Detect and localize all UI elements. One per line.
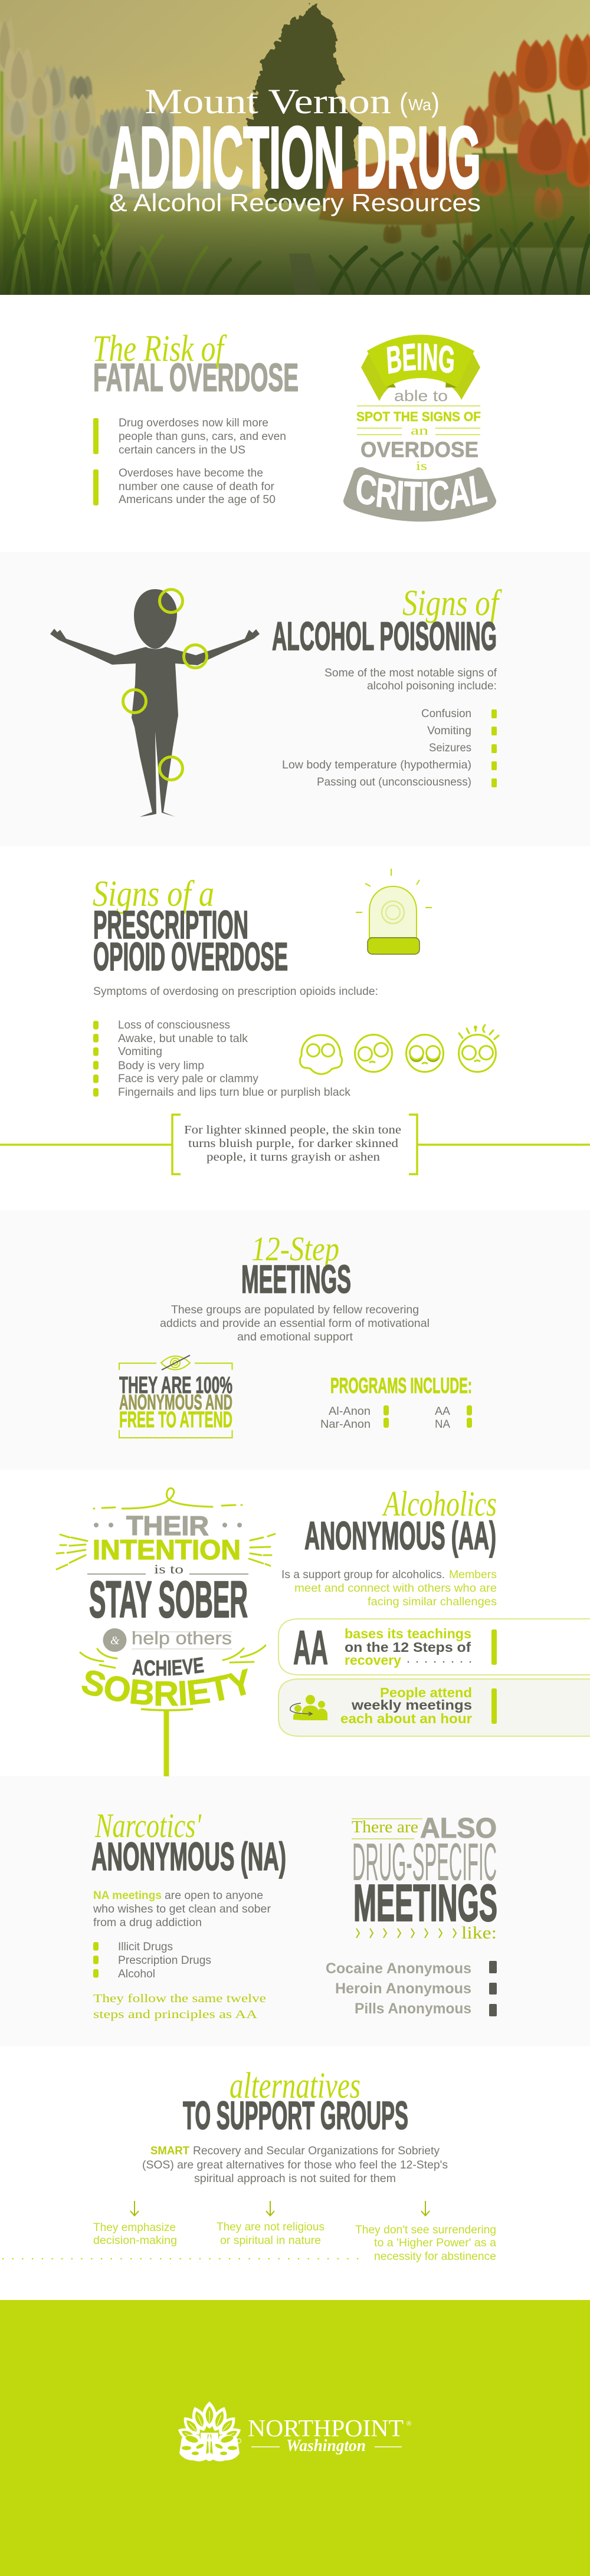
badge: being able to spot the signs [343,335,497,521]
card: AA teachings: AA [293,1621,328,1675]
text: achieve [132,1657,204,1676]
face: sweating [459,1025,499,1072]
intro text [160,1303,430,1343]
fact: drug overdoses: certain cancers in the US [119,443,245,456]
typographic block: drug-specific meetings [352,1813,497,1943]
note: same twelve steps [93,1992,266,2021]
description text: are open to anyone [165,1889,263,1902]
symptom list: Vomiting [118,1045,162,1058]
panel: 12-step meetings [0,1210,590,1470]
point: not religious: or spiritual in nature [220,2234,321,2247]
title line: Mount Vernon (Wa): ) [431,87,440,118]
drug-specific list [326,1960,497,2017]
programs list: Al-Anon [329,1405,371,1418]
fact: leading cause of death: number one cause of death for [119,480,275,493]
symptom list: Awake, but unable to talk [118,1032,248,1045]
description text: who wishes to get clean and sober [93,1903,271,1915]
sign: their intention is to stay sober [55,1487,276,1776]
description text: spiritual approach is not suited for them [194,2172,396,2185]
wings [80,1645,266,1668]
description text: (SOS) are great alternatives for those who feel the 12-Step's [142,2158,448,2171]
rays [57,1534,275,1569]
list of signs: Low body temperature (hypothermia) [282,758,471,771]
point: not religious: They are not religious [217,2220,324,2233]
description text: meet and connect with others who are [294,1582,497,1595]
ampersand badge: & [110,1634,120,1647]
card: AA teachings [278,1619,590,1675]
chevrons [356,1928,456,1938]
callout: anonymous and free: ANONYMOUS AND [119,1390,232,1414]
symptom list: Loss of consciousness [118,1018,230,1031]
sign: their intention is to stay sober: STAY SOBER [89,1571,248,1628]
card: weekly meetings: People attend [380,1685,472,1700]
callout: skin tone note: For lighter skinned people, the skin tone [184,1123,401,1136]
list of signs: Vomiting [427,724,471,737]
ampersand badge [103,1628,126,1652]
face: unfocused eyes [355,1034,392,1072]
point: higher power: to a 'Higher Power' as a [374,2236,496,2249]
text: spot the signs of: SPOT THE SIGNS OF [356,409,481,424]
point: higher power [355,2201,496,2263]
icon: siren [356,869,432,954]
white tulips, left [0,17,14,72]
card: weekly meetings: weekly meetings [351,1697,472,1713]
description text: facing similar challenges [368,1595,497,1608]
text: is to: is to [154,1562,183,1576]
icon: group of people [290,1695,327,1720]
flourish [94,1488,242,1509]
fact: drug overdoses [93,416,286,456]
programs list [320,1405,472,1431]
fact: drug overdoses: Drug overdoses now kill more [119,416,268,429]
sign post [141,1709,193,1776]
intro text [324,666,497,692]
background grey tulips [100,115,174,201]
panel: narcotics anonymous [0,1776,590,2046]
callout: anonymous and free: FREE TO ATTEND [119,1408,232,1432]
intro text: Symptoms of overdosing on prescription opioids include: [93,985,378,998]
callout: anonymous and free [119,1355,232,1438]
list of signs: Passing out (unconsciousness) [317,776,471,788]
text: sobriety: SOBRIETY [81,1668,248,1706]
typographic block: drug-specific meetings: ALSO [420,1813,497,1844]
heading script: Signs of a: Signs of a [93,874,214,914]
hero title [109,82,481,216]
callout: anonymous and free: THEY ARE 100% [119,1372,232,1398]
text: overdose: OVERDOSE [360,438,478,462]
description text [281,1568,497,1608]
note: same twelve steps: steps and principles as AA [93,2008,258,2021]
point: higher power: They don't see surrendering [355,2223,496,2236]
text: able to: able to [394,387,448,405]
description text: SMART [150,2144,189,2157]
text: an: an [411,423,428,438]
stems left [2,71,106,295]
hero photo: tulip field at sunset [0,0,590,295]
intro text: and emotional support [237,1330,353,1343]
text: sobriety [81,1668,248,1706]
symptom list: Fingernails and lips turn blue or purplish black [118,1086,350,1099]
ribbon: being: BEING [387,343,454,374]
icons: overdose faces [300,1025,499,1074]
drug-specific list: Heroin Anonymous [335,1980,471,1997]
face: pale [300,1035,342,1074]
card: weekly meetings: each about an hour [340,1711,472,1726]
description text: NA meetings [93,1889,162,1902]
ribbon: critical: CRITICAL [356,475,487,511]
title line: Mount Vernon (Wa): Mount Vernon [145,82,391,121]
heading: Programs Include: PROGRAMS INCLUDE: [330,1374,472,1398]
symptom list [93,1018,350,1099]
intro text: addicts and provide an essential form of motivational [160,1317,430,1330]
orange tulips, right [516,40,556,93]
fact: leading cause of death: Overdoses have become the [119,466,263,479]
fact: leading cause of death: Americans under the age of 50 [119,493,276,506]
description text [93,1889,271,1929]
ribbon: being [361,335,480,401]
logo: Northpoint Washington [176,2401,411,2462]
programs list: AA [435,1405,450,1418]
list of signs: Confusion [421,707,471,720]
drug list: Prescription Drugs [118,1954,211,1967]
description text: Recovery and Secular Organizations for Sobriety [193,2144,440,2157]
marker circle: shoulder [184,645,206,668]
callout: skin tone note: turns bluish purple, for darker skinned [188,1137,398,1150]
symptom list: Body is very limp [118,1059,204,1072]
drug list: Illicit Drugs [118,1940,173,1953]
intro text: alcohol poisoning include: [367,679,497,692]
title line: Mount Vernon (Wa): Wa [408,96,431,114]
dots [94,1523,242,1527]
drug-specific list: Cocaine Anonymous [326,1960,471,1977]
tree silhouette [245,2,365,203]
heading script: alternatives: alternatives [230,2066,360,2106]
list of signs: Seizures [429,741,471,754]
marker circle: head [159,590,183,612]
text: is: is [416,458,427,473]
heading: Prescription Opioid Overdose: OPIOID OVERDOSE [93,935,288,979]
human figure illustration [50,589,260,817]
heading: Anonymous (NA): ANONYMOUS (NA) [91,1835,286,1879]
text: their: THEIR [126,1510,209,1541]
card: AA teachings: on the 12 Steps of [345,1639,471,1655]
panel: the risk of fatal overdose [0,295,581,521]
heading script: Signs of: Signs of [402,583,502,623]
list of signs [282,707,497,788]
description text [142,2144,448,2185]
logo icon: peacock [176,2401,243,2462]
note: same twelve steps: They follow the same twelve [93,1992,266,2005]
grass foreground [3,201,590,295]
point: decision-making [93,2201,177,2247]
heading: Prescription Opioid Overdose: PRESCRIPTION [93,903,248,947]
point: not religious [217,2201,324,2247]
heading: Fatal Overdose: FATAL OVERDOSE [93,356,299,400]
fact: drug overdoses: people than guns, cars, and even [119,430,286,443]
point: higher power: necessity for abstinence [374,2250,496,2263]
marker circle: leg [159,757,183,780]
title line: Alcohol Recovery Resources: & Alcohol Recovery Resources [109,189,481,216]
card: AA teachings: bases its teachings [345,1626,471,1641]
callout: skin tone note [0,1115,590,1174]
drug-specific list: Pills Anonymous [355,2000,471,2017]
panel: footer [0,2300,590,2576]
registered mark: ® [407,2420,411,2427]
fact: leading cause of death [93,466,276,506]
panel: alternatives to support groups [0,2046,590,2300]
panel: alcoholics anonymous [55,1484,590,1776]
heading: Prescription Opioid Overdose [93,903,288,979]
panel: signs of alcohol poisoning [0,552,590,846]
description text: Members [449,1568,497,1581]
card: AA teachings: recovery [345,1652,401,1668]
face: dark circles [406,1034,444,1072]
intro text: Some of the most notable signs of [324,666,497,679]
description text: from a drug addiction [93,1916,202,1929]
wordmark: Northpoint: NORTHPOINT [248,2414,404,2442]
marker circle: hip [123,690,146,712]
drug list [93,1940,211,1980]
point: decision-making: decision-making [93,2234,177,2247]
typographic block: drug-specific meetings: like: [461,1923,497,1943]
orange tulip background [319,156,507,225]
heading script: 12-Step: 12-Step [251,1230,339,1268]
text: intention: INTENTION [93,1534,241,1565]
panel: hero header [0,0,590,295]
panel: prescription opioid overdose [0,846,590,1210]
heading script: The Risk of: The Risk of [93,327,227,369]
heading script: Alcoholics: Alcoholics [382,1484,497,1523]
text: help others: help others [132,1628,232,1648]
heading: Meetings: MEETINGS [241,1257,351,1302]
stems right [454,83,584,295]
description text: Is a support group for alcoholics. [281,1568,445,1581]
wordmark: Washington: Washington [286,2437,366,2455]
programs list: NA [435,1418,450,1431]
programs list: Nar-Anon [320,1418,371,1431]
heading script: Narcotics': Narcotics' [94,1806,202,1845]
title line: Mount Vernon (Wa): ( [399,87,408,118]
title line: Mount Vernon (Wa) [145,82,440,121]
icon: crossed-out eye [161,1355,190,1370]
text: achieve: ACHIEVE [132,1657,204,1676]
typographic block: drug-specific meetings: There are [352,1818,418,1836]
card: weekly meetings [278,1679,590,1736]
callout: skin tone note: people, it turns grayish or ashen [206,1151,380,1164]
drug list: Alcohol [118,1967,155,1980]
intro text: These groups are populated by fellow recovering [171,1303,419,1316]
point: decision-making: They emphasize [93,2221,176,2234]
symptom list: Face is very pale or clammy [118,1072,258,1085]
